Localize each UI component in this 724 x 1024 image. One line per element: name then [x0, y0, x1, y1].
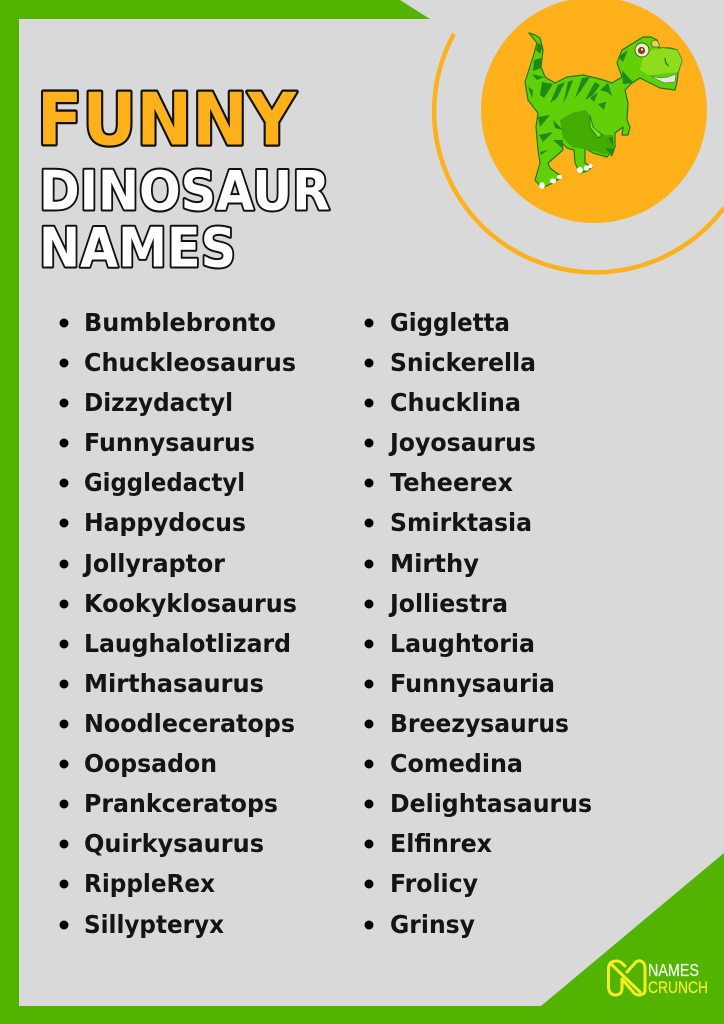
list: right column: Joyosaurus: [388, 428, 536, 457]
list: left column: Dizzydactyl: [84, 388, 233, 417]
list: right column: Funnysauria: [390, 669, 555, 698]
list: left column: Bumblebronto: [84, 308, 276, 337]
list: left column: Funnysaurus: [84, 428, 255, 457]
title: Funny: FUNNY: [37, 78, 297, 162]
list: right column: Breezysaurus: [390, 709, 569, 738]
list: left column: Laughalotlizard: [84, 629, 291, 658]
list: right column: Mirthy: [390, 549, 479, 578]
list: right column: Snickerella: [390, 348, 536, 377]
list: right column: Grinsy: [390, 910, 475, 939]
list: right column: [364, 308, 592, 939]
decorative ring: [434, 34, 724, 272]
list: left column: Kookyklosaurus: [84, 589, 297, 618]
list: right column: Smirktasia: [390, 508, 532, 537]
icon: green dinosaur: [525, 33, 682, 189]
list: left column: [60, 308, 297, 939]
dinosaur arm: [590, 115, 602, 138]
logo: Names Crunch: [608, 960, 708, 997]
list: right column: Laughtoria: [390, 629, 535, 658]
dinosaur brow: [651, 40, 659, 47]
list: left column: RippleRex: [84, 869, 215, 898]
dinosaur body: [525, 33, 682, 188]
list: right column: Elfinrex: [390, 829, 492, 858]
list: right column: Frolicy: [390, 869, 478, 898]
dinosaur stripes: [528, 43, 634, 157]
list: left column: Happydocus: [84, 508, 246, 537]
list: left column: Quirkysaurus: [84, 829, 264, 858]
list: left column: Jollyraptor: [82, 549, 226, 578]
list: right column: Jolliestra: [388, 589, 508, 618]
logo icon: [608, 961, 645, 995]
list: right column: Giggletta: [390, 308, 510, 337]
dinosaur teeth: [651, 74, 676, 83]
list: right column: Comedina: [390, 749, 523, 778]
logo wordmark: Crunch: CRUNCH: [648, 978, 708, 997]
dinosaur eye: [635, 43, 649, 57]
list: left column: Mirthasaurus: [84, 669, 264, 698]
list: right column: Teheerex: [390, 468, 513, 497]
logo wordmark: Names: NAMES: [648, 960, 699, 980]
orange circle: [481, 0, 707, 223]
dinosaur claws: [539, 164, 592, 189]
dinosaur snout: [640, 48, 682, 75]
list: right column: Chucklina: [390, 388, 521, 417]
list: left column: Oopsadon: [84, 749, 217, 778]
list: left column: Giggledactyl: [84, 468, 245, 497]
list: left column: Prankceratops: [84, 789, 278, 818]
list: right column: Delightasaurus: [390, 789, 592, 818]
title: Dinosaur: DINOSAUR: [39, 160, 330, 222]
list: left column: Chuckleosaurus: [84, 348, 296, 377]
list: left column: Noodleceratops: [84, 709, 295, 738]
dinosaur belly: [560, 110, 614, 155]
dinosaur nostril: [665, 58, 669, 66]
list: left column: Sillypteryx: [84, 910, 224, 939]
title: Names: NAMES: [39, 216, 236, 280]
